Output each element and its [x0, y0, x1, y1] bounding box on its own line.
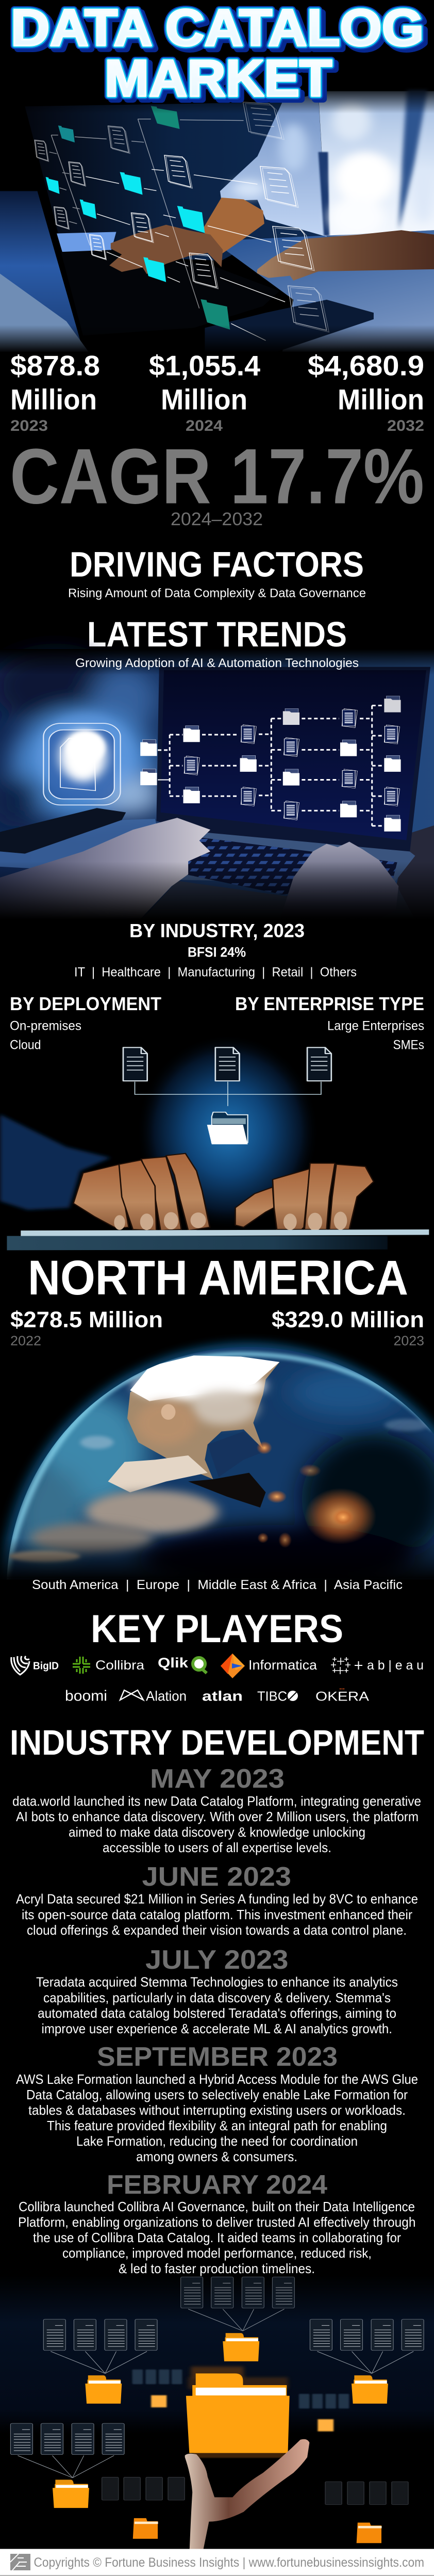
- market size stat: 2023: Million: [10, 383, 97, 416]
- logo: Informatica: Informatica: [248, 1657, 318, 1673]
- text: June 2023: its open-source data catalog platform. This investment enhanced their: [22, 1907, 412, 1922]
- footer: [0, 2549, 434, 2576]
- text: September 2023: [16, 2071, 418, 2164]
- date: September 2023: SEPTEMBER 2023: [97, 2042, 338, 2072]
- right hand: [235, 1163, 374, 1229]
- north america value 2023: $329.0 Million: [272, 1307, 424, 1332]
- enterprise type list: SMEs: [393, 1038, 424, 1052]
- hero photo: hands on laptop with data catalog diagram: [0, 0, 434, 353]
- glowing document icon: [36, 712, 136, 805]
- title: DATA CATALOG: [14, 2, 427, 60]
- text: July 2023: capabilities, particularly in data discovery & delivery. Stemma's: [43, 1990, 391, 2005]
- market size stat: 2032: [308, 350, 424, 434]
- logo: Collibra: [73, 1657, 144, 1674]
- market size stat: 2024: [149, 350, 260, 434]
- other regions list: South America | Europe | Middle East & Africa | Asia Pacific: [32, 1578, 403, 1592]
- title: DATA CATALOG: [11, 0, 424, 57]
- text: May 2023: aimed to make data discovery & knowledge unlocking: [69, 1824, 365, 1840]
- text: February 2024: compliance, improved model performance, reduced risk,: [62, 2245, 372, 2261]
- date: May 2023: MAY 2023: [150, 1764, 285, 1794]
- north america value 2023: [272, 1307, 424, 1349]
- folder group: upper right: [310, 2319, 424, 2404]
- hand holding folder: [185, 2439, 309, 2549]
- footer logo: [10, 2554, 30, 2570]
- CAGR period: 2024–2032: [171, 509, 263, 529]
- title: MARKET: [105, 50, 332, 107]
- market size stat: 2023: $878.8: [10, 350, 100, 382]
- text: September 2023: This feature provided flexibility & an integral path for enabling: [47, 2118, 387, 2133]
- text: September 2023: Lake Formation, reducing the need for coordination: [76, 2133, 358, 2149]
- enterprise type list: Large Enterprises: [327, 1018, 424, 1033]
- laptop photo with file network: [0, 649, 434, 935]
- logo: Collibra: Collibra: [95, 1658, 144, 1673]
- folder group: lower left: [10, 2423, 124, 2508]
- title: DATA CATALOG: [11, 0, 424, 57]
- heading: north america: NORTH AMERICA: [28, 1251, 408, 1305]
- heading: by enterprise type: BY ENTERPRISE TYPE: [235, 993, 424, 1014]
- market size stat: 2023: [10, 350, 100, 434]
- folder icon: [207, 1112, 248, 1144]
- text: September 2023: Data Catalog, allowing users to selectively enable Lake Formation for: [26, 2087, 408, 2102]
- connector lines: [135, 1082, 321, 1106]
- logo: tableau: a b | e a u: [367, 1658, 424, 1673]
- logo: atlan: atlan: [202, 1688, 243, 1704]
- text: September 2023: tables & databases without interrupting existing users or workloads.: [28, 2102, 406, 2118]
- bottom photo: folders and hand: [0, 2275, 434, 2549]
- folder group: upper left: [43, 2319, 157, 2404]
- city lights: [257, 1441, 376, 1548]
- text: July 2023: automated data catalog bolstered Teradata's offerings, aiming to: [38, 2005, 396, 2021]
- heading: latest trends: LATEST TRENDS: [87, 614, 347, 654]
- logo: tableau: [331, 1657, 424, 1674]
- typing hands photo with document tree: [0, 1034, 429, 1250]
- market size stat: 2024: Million: [161, 383, 247, 416]
- other industries list: IT | Healthcare | Manufacturing | Retail | Others: [74, 965, 357, 979]
- file network icons: [140, 696, 401, 832]
- logo: Qlik: [158, 1655, 207, 1673]
- text: May 2023: accessible to users of all expertise levels.: [103, 1840, 331, 1855]
- date: July 2023: JULY 2023: [145, 1945, 289, 1975]
- text: September 2023: among owners & consumers.: [136, 2149, 297, 2164]
- heading: by industry: BY INDUSTRY, 2023: [129, 920, 305, 941]
- heading: key players: KEY PLAYERS: [91, 1607, 343, 1651]
- three document icons: [123, 1047, 331, 1081]
- market size stat: 2032: 2032: [387, 417, 424, 434]
- logo: TIBCO: TIBC: [257, 1688, 287, 1704]
- text: February 2024: the use of Collibra Data Catalog. It aided teams in collaborating for: [33, 2230, 401, 2245]
- dashed file network lines: [158, 706, 383, 826]
- market size stat: 2032: Million: [338, 383, 424, 416]
- text: June 2023: [16, 1891, 418, 1938]
- title: [11, 0, 427, 110]
- market size stat: 2032: $4,680.9: [308, 350, 424, 382]
- dim folder group: lower middle: [102, 2477, 185, 2539]
- date: February 2024: FEBRUARY 2024: [107, 2170, 327, 2200]
- enterprise type list: [327, 1018, 424, 1052]
- text: June 2023: cloud offerings & expanded their vision towards a data control plane.: [27, 1922, 407, 1938]
- text: July 2023: Teradata acquired Stemma Technologies to enhance its analytics: [36, 1974, 398, 1989]
- text: February 2024: & led to faster production timelines.: [119, 2261, 315, 2276]
- text: May 2023: [12, 1793, 421, 1855]
- folder group: top: [181, 2277, 294, 2361]
- heading: driving factors: DRIVING FACTORS: [70, 545, 364, 584]
- deployment list: [10, 1018, 81, 1052]
- deployment list: On-premises: [10, 1018, 81, 1033]
- deployment list: Cloud: [10, 1038, 41, 1052]
- large orange folder: [186, 2367, 290, 2458]
- text: February 2024: Platform, enabling organizations to deliver trusted AI effectively through: [18, 2214, 415, 2230]
- cyan and teal folders: [46, 106, 230, 330]
- logo: Informatica: [221, 1654, 318, 1678]
- text: July 2023: [36, 1974, 398, 2036]
- logo: boomi: boomi: [65, 1688, 107, 1705]
- dim folder group: lower right: [325, 2482, 408, 2543]
- driving factors text: Rising Amount of Data Complexity & Data Governance: [68, 586, 366, 601]
- text: July 2023: improve user experience & accelerate ML & AI analytics growth.: [41, 2021, 392, 2036]
- latest trends text: Growing Adoption of AI & Automation Technologies: [75, 656, 359, 670]
- market size stat: 2024: 2024: [186, 417, 223, 434]
- title: MARKET: [108, 53, 336, 110]
- date: June 2023: JUNE 2023: [142, 1862, 291, 1892]
- blurred folder group: small right: [299, 2394, 349, 2432]
- logo: OKERA: OKERA: [315, 1689, 369, 1704]
- left hand: [73, 1154, 210, 1230]
- market size stat: 2023: 2023: [10, 417, 48, 434]
- earth photo: [0, 1336, 434, 1579]
- leading industry share: BFSI 24%: [188, 944, 246, 960]
- logo: Alation: [120, 1688, 187, 1704]
- logo: Alation: Alation: [146, 1688, 187, 1704]
- company logos: [11, 1654, 424, 1705]
- document outlines: [35, 102, 329, 332]
- market size stat: 2024: $1,055.4: [149, 350, 260, 382]
- title: DATA CATALOG: [11, 0, 424, 57]
- logo: BigID: [11, 1656, 59, 1675]
- title: MARKET: [105, 50, 332, 107]
- north america value 2022: [10, 1307, 163, 1349]
- north america value 2022: 2022: [10, 1333, 41, 1349]
- text: February 2024: [18, 2199, 415, 2276]
- logo: BigID: BigID: [33, 1660, 59, 1672]
- logo: Qlik: Qlik: [158, 1655, 189, 1671]
- north america value 2022: $278.5 Million: [10, 1307, 163, 1332]
- north america value 2023: 2023: [394, 1333, 424, 1349]
- blurred folder group: small left: [132, 2370, 182, 2407]
- heading: by deployment: BY DEPLOYMENT: [10, 993, 161, 1014]
- title: MARKET: [105, 50, 332, 107]
